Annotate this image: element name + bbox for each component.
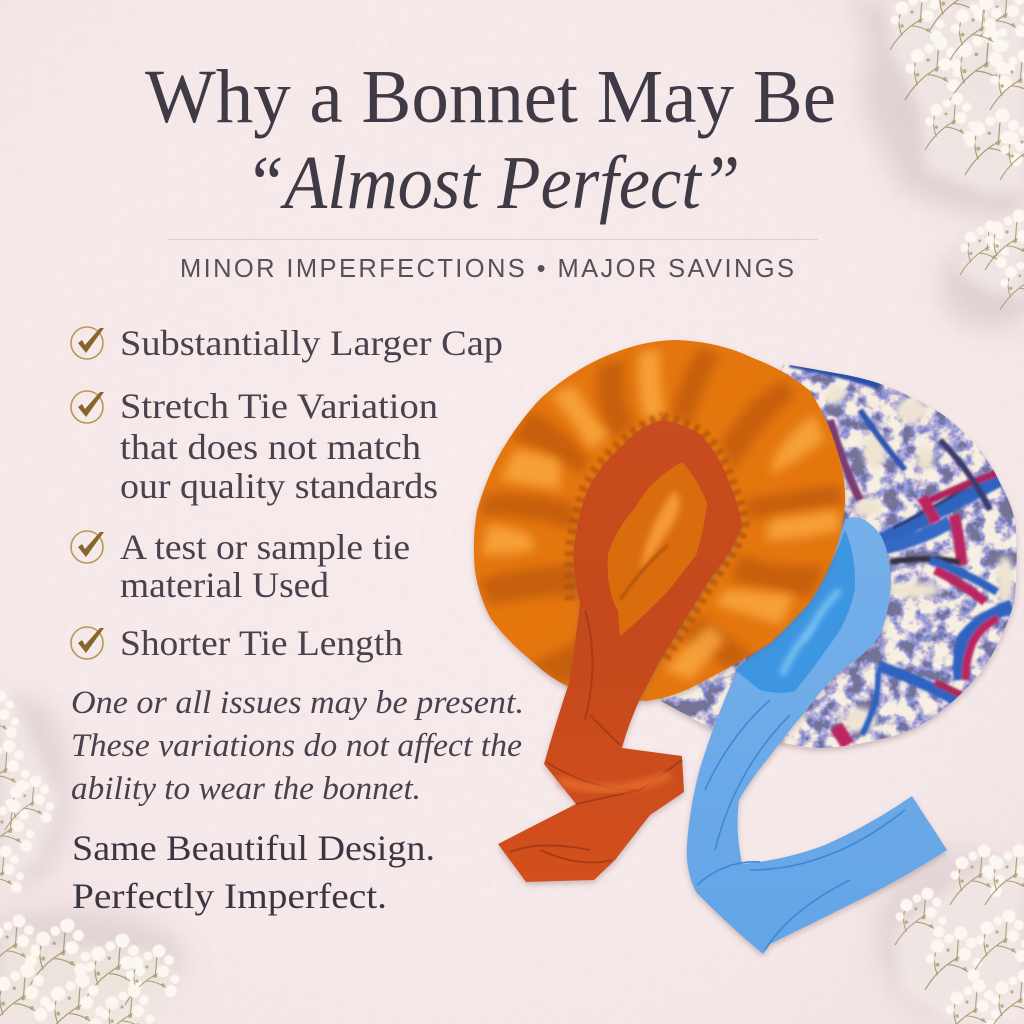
item 2: that does not match xyxy=(120,427,421,467)
inner satin opening xyxy=(608,462,707,636)
paisley cream patches xyxy=(825,386,1014,732)
title xyxy=(145,55,836,225)
subtitle: MINOR IMPERFECTIONS • MAJOR SAVINGS xyxy=(180,255,794,283)
item 4: Shorter Tie Length xyxy=(120,623,403,663)
closing statement: Same Beautiful Design. xyxy=(72,828,435,868)
orange tie xyxy=(498,420,742,882)
paisley colour bands xyxy=(790,363,1012,745)
title: Why a Bonnet May Be xyxy=(145,55,836,139)
bonnets photo xyxy=(474,340,1024,954)
flowers: right edge xyxy=(940,210,1024,330)
divider xyxy=(168,239,818,240)
italic note: One or all issues may be present. xyxy=(71,685,524,721)
item 3: material Used xyxy=(120,565,329,605)
icon: check 4 xyxy=(71,627,104,659)
elastic gathers left xyxy=(569,417,663,600)
paisley bonnet xyxy=(650,350,1024,760)
item 1: Substantially Larger Cap xyxy=(120,323,503,363)
orange bonnet xyxy=(474,340,845,701)
flowers: bottom right corner xyxy=(875,844,1024,1024)
title: “Almost Perfect” xyxy=(245,141,740,225)
blue tie and inner cap xyxy=(687,518,947,954)
icon: check 1 xyxy=(71,327,104,359)
closing statement: Perfectly Imperfect. xyxy=(72,876,387,916)
icon: check 3 xyxy=(71,531,104,563)
italic note xyxy=(71,685,524,807)
italic note: These variations do not affect the xyxy=(71,728,522,764)
blue inner satin xyxy=(735,530,855,693)
satin folds xyxy=(478,348,842,685)
item 2 xyxy=(120,386,438,506)
italic note: ability to wear the bonnet. xyxy=(71,771,421,807)
icon: check 2 xyxy=(71,391,104,423)
closing statement xyxy=(72,828,435,916)
item 2: our quality standards xyxy=(120,466,438,506)
flowers: left edge xyxy=(0,691,70,900)
checklist xyxy=(71,323,503,663)
flowers: top right corner xyxy=(850,0,1024,220)
flowers: bottom left corner xyxy=(0,910,185,1024)
item 3: A test or sample tie xyxy=(120,527,410,567)
item 2: Stretch Tie Variation xyxy=(120,386,438,426)
item 3 xyxy=(120,527,410,605)
elastic gathers xyxy=(663,417,745,660)
